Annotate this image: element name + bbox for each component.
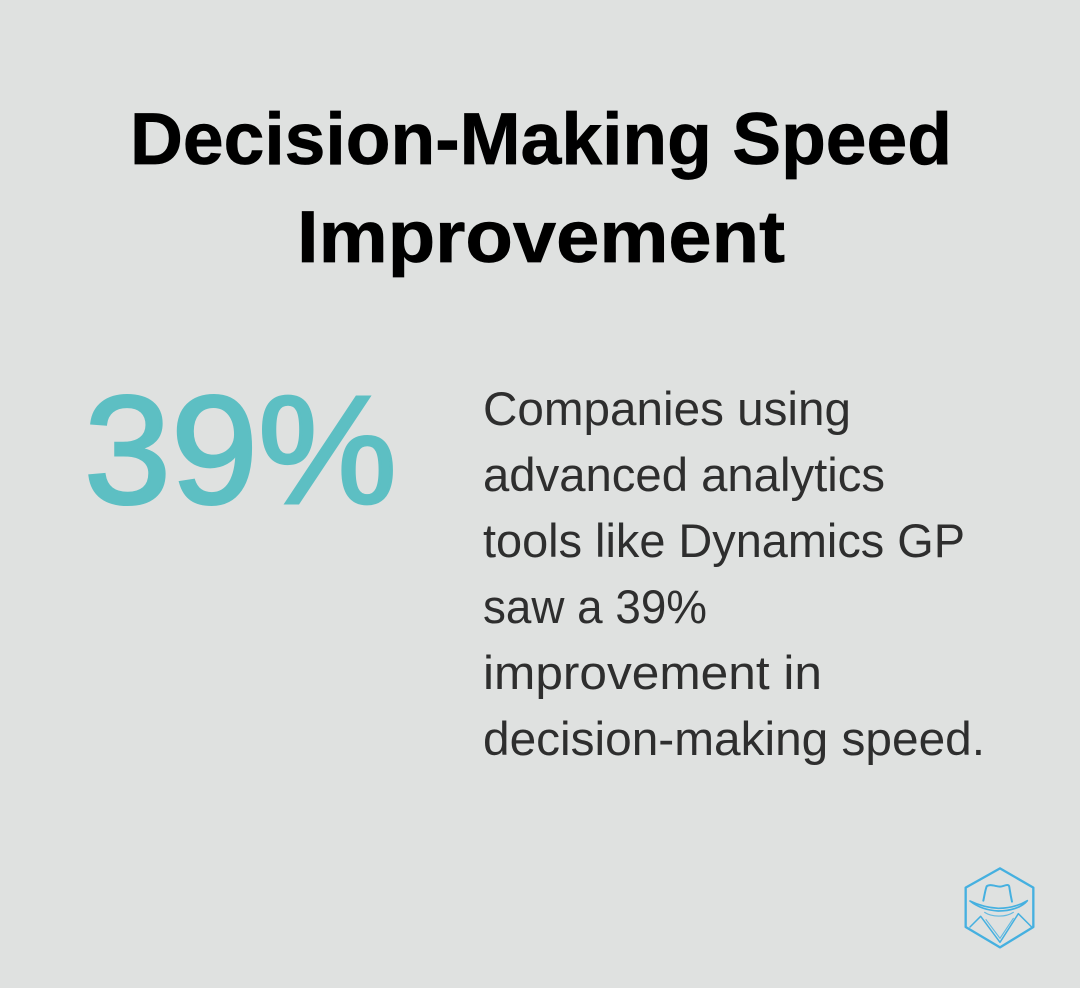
description text: advanced analytics bbox=[483, 448, 885, 501]
title: Decision-Making Speed bbox=[130, 99, 952, 180]
description text: Companies using bbox=[483, 382, 851, 435]
description text bbox=[483, 382, 985, 765]
big statistic: 39%: 39% bbox=[84, 364, 397, 536]
description text: improvement in bbox=[483, 646, 822, 699]
description text: decision-making speed. bbox=[483, 712, 985, 765]
title bbox=[130, 99, 952, 278]
description text: saw a 39% bbox=[483, 580, 707, 633]
icon: hexagon logo with spy hat bbox=[966, 868, 1033, 947]
description text: tools like Dynamics GP bbox=[483, 514, 965, 567]
title: Improvement bbox=[297, 197, 785, 278]
